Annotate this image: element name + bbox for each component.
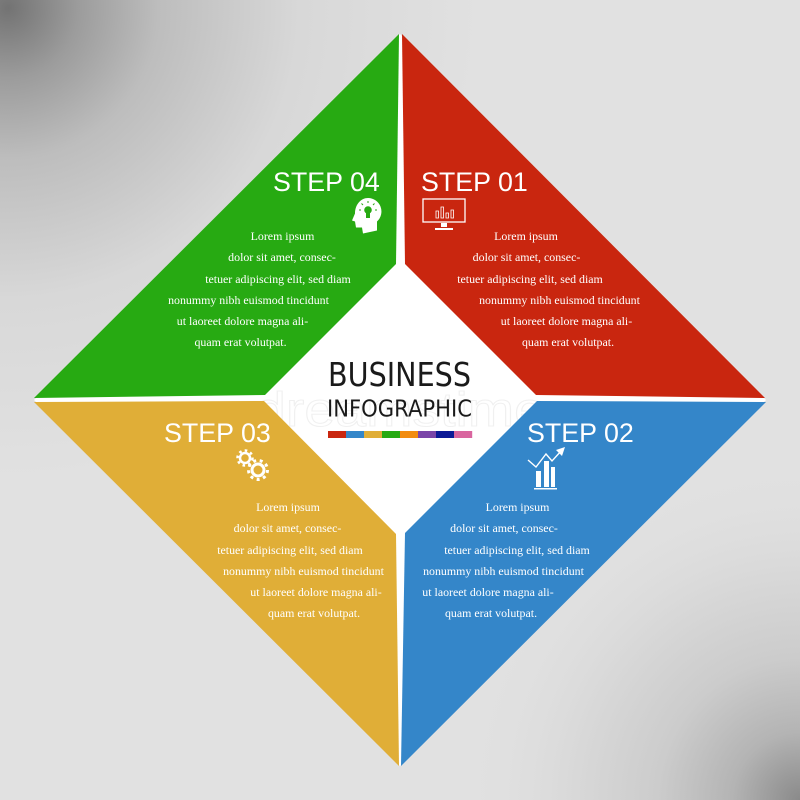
body text: step 01: Lorem ipsum [494,229,559,243]
colour strip [328,431,472,438]
body text: step 02 [422,500,591,620]
heading: step 03: STEP 03 [164,418,271,448]
title [327,355,472,422]
body text: step 04: Lorem ipsum [251,229,315,243]
body text: step 01: tetuer adipiscing elit, sed diam [457,272,604,286]
panel: step 04 green [34,34,399,398]
panel: step 03 yellow [34,401,399,766]
body text: step 02: quam erat volutpat. [445,606,537,620]
body text: step 03: Lorem ipsum [256,500,321,514]
body text: step 04: tetuer adipiscing elit, sed diam [205,272,352,286]
heading: step 04: STEP 04 [273,167,380,197]
body text: step 01: nonummy nibh euismod tincidunt [479,293,641,307]
icon: monitor with bars [423,199,465,230]
icon: gears [238,450,268,480]
body text: step 03 [217,500,385,620]
body text: step 04: quam erat volutpat. [194,335,287,349]
body text: step 02: Lorem ipsum [486,500,550,514]
body text: step 03: quam erat volutpat. [268,606,360,620]
body text: step 02: tetuer adipiscing elit, sed diam [444,543,591,557]
body text: step 03: nonummy nibh euismod tincidunt [223,564,385,578]
body text: step 01 [457,229,641,349]
watermark: dreamstime [255,384,545,437]
body text: step 04: dolor sit amet, consec- [228,250,336,264]
heading: step 01: STEP 01 [421,167,528,197]
body text: step 02: dolor sit amet, consec- [450,521,558,535]
body text: step 03: ut laoreet dolore magna ali- [250,585,382,599]
body text: step 04 [168,229,352,349]
body text: step 02: ut laoreet dolore magna ali- [422,585,554,599]
panel: step 02 blue [401,401,766,766]
title: INFOGRAPHIC [327,396,472,422]
body text: step 01: quam erat volutpat. [522,335,614,349]
icon: chart with rising arrow [528,447,565,490]
body text: step 04: ut laoreet dolore magna ali- [177,314,308,328]
panel: step 01 red [402,34,765,398]
body text: step 04: nonummy nibh euismod tincidunt [168,293,330,307]
body text: step 03: dolor sit amet, consec- [234,521,341,535]
heading: step 02: STEP 02 [527,418,634,448]
body text: step 02: nonummy nibh euismod tincidunt [423,564,585,578]
body text: step 01: ut laoreet dolore magna ali- [501,314,632,328]
body text: step 01: dolor sit amet, consec- [473,250,580,264]
title: BUSINESS [328,355,471,394]
icon: head with light bulb [352,198,381,234]
body text: step 03: tetuer adipiscing elit, sed diam [217,543,364,557]
